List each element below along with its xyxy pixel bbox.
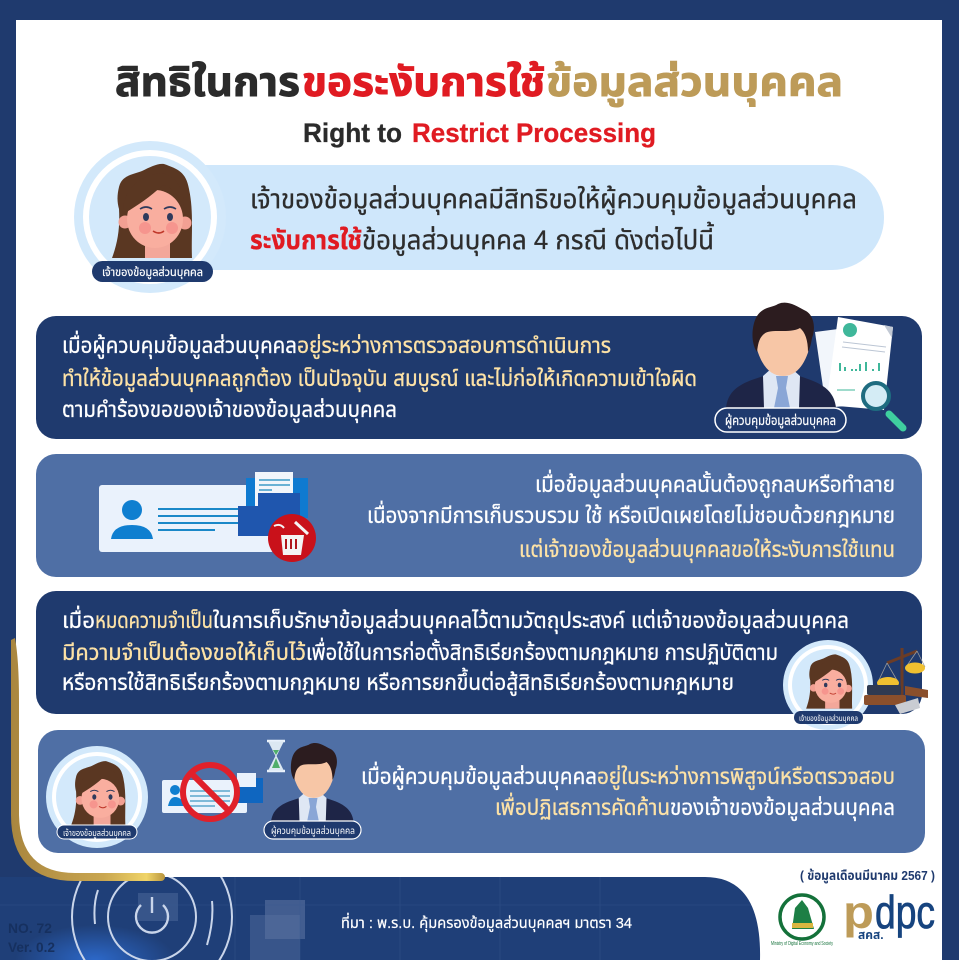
title <box>115 59 843 107</box>
case 1 text <box>62 330 697 423</box>
case 4 text: เมื่อผู้ควบคุมข้อมูลส่วนบุคคล <box>361 761 597 790</box>
avatar: data subject <box>74 141 226 293</box>
case 1 text: เมื่อผู้ควบคุมข้อมูลส่วนบุคคล <box>62 330 297 359</box>
icon: hourglass <box>267 741 285 771</box>
case 4 text: เพื่อปฏิเสธการคัดค้าน <box>495 792 670 820</box>
case 3 text: หรือการใช้สิทธิเรียกร้องตามกฎหมาย หรือการยกขึ้นต่อสู้สิทธิเรียกร้องตามกฎหมาย <box>62 667 734 696</box>
logo: ministry emblem: Ministry of Digital Economy and Society <box>771 941 833 947</box>
icon: scales and books <box>864 648 928 714</box>
case 3 text: ในการเก็บรักษาข้อมูลส่วนบุคคลไว้ตามวัตถุประสงค์ แต่เจ้าของข้อมูลส่วนบุคคล <box>213 608 849 634</box>
version note: NO. 72 <box>8 920 52 936</box>
avatar: data subject <box>46 746 148 848</box>
case 4 text: ของเจ้าของข้อมูลส่วนบุคคล <box>670 795 895 821</box>
subtitle <box>303 118 656 148</box>
avatar: data subject with scales <box>783 640 928 730</box>
figure: data controller <box>271 743 354 822</box>
icon: documents and magnifier <box>815 317 903 428</box>
case 3 text: เมื่อ <box>62 605 95 633</box>
case 2 text: เมื่อข้อมูลส่วนบุคคลนั้นต้องถูกลบหรือทำลาย <box>535 469 895 498</box>
case 3 text: เพื่อใช้ในการก่อตั้งสิทธิเรียกร้องตามกฎหมาย การปฏิบัติตาม <box>306 637 778 665</box>
subtitle: Restrict Processing <box>412 118 656 148</box>
icon: prohibited data card <box>162 765 263 819</box>
title: ข้อมูลส่วนบุคคล <box>546 59 843 107</box>
case 1 text: ตามคำร้องขอของเจ้าของข้อมูลส่วนบุคคล <box>62 397 397 423</box>
case 2 text <box>367 469 895 563</box>
case 2 text: แต่เจ้าของข้อมูลส่วนบุคคลขอให้ระงับการใช้แทน <box>519 537 895 563</box>
avatar: data subject: เจ้าของข้อมูลส่วนบุคคล <box>102 265 203 279</box>
case 1 text: ทำให้ข้อมูลส่วนบุคคลถูกต้อง เป็นปัจจุบัน สมบูรณ์ และไม่ก่อให้เกิดความเข้าใจผิด <box>62 366 697 392</box>
avatar: data subject with scales: เจ้าของข้อมูลส่วนบุคคล <box>799 713 858 724</box>
case 3 text <box>62 605 849 696</box>
panel: case 1 <box>36 303 922 439</box>
icon: power symbol rings <box>72 837 232 960</box>
panel: case 4 <box>38 730 925 853</box>
label: data controller: ผู้ควบคุมข้อมูลส่วนบุคคล <box>271 824 355 837</box>
title: ขอระงับการใช้ <box>302 59 545 105</box>
case 3 text: หมดความจำเป็น <box>95 608 213 633</box>
icon: ID card, folder and trash <box>99 472 316 562</box>
label: data controller <box>715 408 846 432</box>
intro text: ข้อมูลส่วนบุคคล 4 กรณี ดังต่อไปนี้ <box>362 221 714 256</box>
case 1 text: อยู่ระหว่างการตรวจสอบการดำเนินการ <box>297 333 611 359</box>
case 3 text: มีความจำเป็นต้องขอให้เก็บไว้ <box>62 640 306 665</box>
footer technology background <box>0 837 760 960</box>
case 4 text <box>361 761 895 821</box>
panel: case 3 <box>36 591 928 730</box>
case 2 text: เนื่องจากมีการเก็บรวบรวม ใช้ หรือเปิดเผยโดยไม่ชอบด้วยกฎหมาย <box>367 500 895 528</box>
logo: PDPC: p <box>843 886 874 938</box>
logo: PDPC: สคส. <box>858 928 884 942</box>
panel: intro banner <box>74 141 884 293</box>
title: สิทธิในการ <box>115 59 300 105</box>
data date note: ( ข้อมูลเดือนมีนาคม 2567 ) <box>800 868 935 884</box>
source note: ที่มา : พ.ร.บ. คุ้มครองข้อมูลส่วนบุคคลฯ มาตรา 34 <box>341 912 632 932</box>
avatar: data subject: เจ้าของข้อมูลส่วนบุคคล <box>63 828 131 839</box>
gold accent curve <box>11 638 165 881</box>
intro text: ระงับการใช้ <box>250 225 362 255</box>
label: data controller: ผู้ควบคุมข้อมูลส่วนบุคคล <box>725 413 836 428</box>
version note <box>8 920 55 955</box>
figure: data controller <box>726 303 836 408</box>
case 4 text: อยู่ในระหว่างการพิสูจน์หรือตรวจสอบ <box>597 764 895 790</box>
version note: Ver. 0.2 <box>8 939 55 955</box>
logo: ministry emblem <box>771 895 833 947</box>
subtitle: Right to <box>303 118 402 148</box>
label: data controller <box>264 821 361 839</box>
logo: PDPC <box>843 886 935 942</box>
intro text <box>250 184 857 256</box>
logo: PDPC: dpc <box>875 886 935 938</box>
panel: case 2 <box>36 454 922 577</box>
intro text: เจ้าของข้อมูลส่วนบุคคลมีสิทธิขอให้ผู้ควบคุมข้อมูลส่วนบุคคล <box>250 184 857 215</box>
